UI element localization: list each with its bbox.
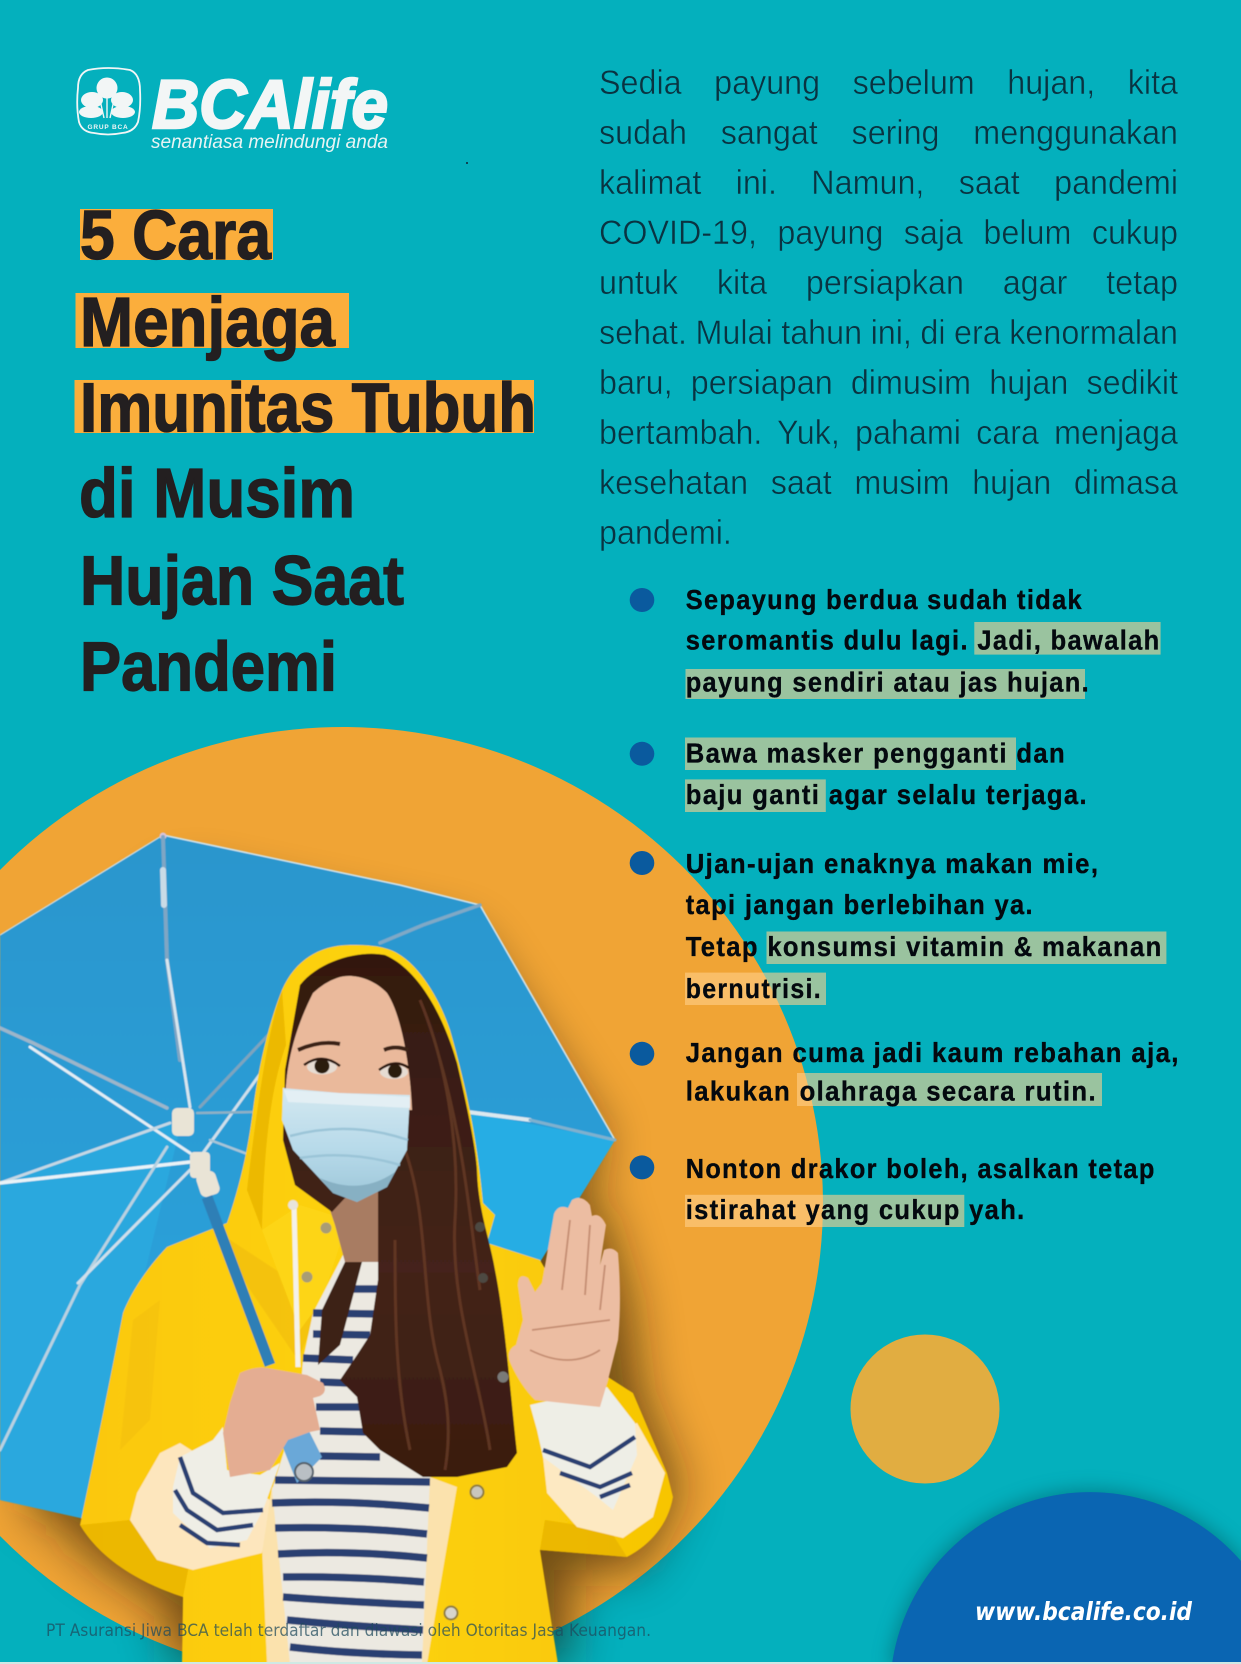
right sleeve lining [543,1423,665,1538]
bottom edge strip [0,1662,1241,1664]
intro paragraph: COVID-19, payung saja belum cukup [599,214,1178,252]
photo shadow [30,875,680,1664]
tip 2 [630,738,1088,810]
wordmark: BCAlife [152,66,388,143]
umbrella shaft [207,1197,270,1365]
tagline: senantiasa melindungi anda [151,132,388,153]
big orange circle [0,727,823,1664]
tips list [630,584,1180,1227]
umbrella handle [280,1427,322,1483]
face mask [282,1088,410,1202]
raincoat folds [80,990,627,1597]
tip 5 [630,1153,1156,1225]
logo: BCA Life [77,66,468,164]
left hand on handle [223,1368,325,1477]
tip 3: Ujan-ujan enaknya makan mie, [686,848,1099,879]
intro paragraph: baru, persiapan dimusim hujan sedikit [599,364,1178,402]
tip 5: Nonton drakor boleh, asalkan tetap [686,1153,1156,1184]
tip 1 [630,584,1161,697]
speck [466,162,468,164]
title text: Hujan Saat [80,542,404,620]
tip 3: Tetap konsumsi vitamin & makanan [686,931,1163,962]
tip 4: Jangan cuma jadi kaum rebahan aja, [686,1037,1180,1068]
website url: www.bcalife.co.id [975,1597,1193,1626]
tip 1: payung sendiri atau jas hujan. [686,666,1090,697]
intro paragraph [599,64,1178,552]
tip 3: bernutrisi. [686,973,822,1004]
tip 5: istirahat yang cukup yah. [686,1194,1026,1225]
neck [320,1180,395,1262]
striped shirt [272,1255,430,1664]
hair [283,954,517,1477]
emblem: GRUP BCA [88,124,128,131]
tip 4 [630,1037,1180,1106]
intro paragraph: untuk kita persiapkan agar tetap [599,264,1178,302]
tip 3 [630,848,1163,1004]
right sleeve striped cuff [530,1387,637,1510]
eyes [307,1060,337,1074]
title text: di Musim [79,454,355,532]
hood collar lapel [262,1205,348,1330]
tip 3: tapi jangan berlebihan ya. [686,889,1034,920]
face [285,976,412,1110]
tip 1: Sepayung berdua sudah tidak [686,584,1083,615]
title text: 5 Cara [80,196,272,274]
umbrella canopy [0,832,615,1519]
title text: Menjaga [80,283,336,361]
emblem [77,68,140,134]
tip highlights [685,622,1166,1227]
intro paragraph: pandemi. [599,514,732,552]
hood drawstring and snaps [288,1200,508,1620]
umbrella ribs [0,837,615,1450]
tip 1: seromantis dulu lagi. Jadi, bawalah [686,625,1161,656]
left sleeve lining [130,1443,270,1570]
photo: woman in raincoat with umbrella [0,832,680,1664]
raincoat [80,945,673,1664]
eyebrows [298,1043,340,1050]
raised right hand [509,1198,620,1407]
left sleeve striped cuff [173,1427,280,1548]
title text: Imunitas Tubuh [80,368,536,446]
title text: Pandemi [80,628,337,706]
intro paragraph: kalimat ini. Namun, saat pandemi [599,164,1178,202]
disclaimer: PT Asuransi Jiwa BCA telah terdaftar dan diawasi oleh Otoritas Jasa Keuangan. [46,1621,651,1641]
title [74,196,536,706]
tip 2: Bawa masker pengganti dan [686,738,1066,768]
blue corner circle [892,1492,1241,1664]
small yellow circle [850,1334,1000,1484]
intro paragraph: bertambah. Yuk, pahami cara menjaga [599,414,1178,452]
coat inner cream strips [262,1477,457,1664]
intro paragraph: sehat. Mulai tahun ini, di era kenormalan [599,314,1178,352]
title text [79,196,536,706]
intro paragraph: Sedia payung sebelum hujan, kita [599,64,1178,102]
intro paragraph: sudah sangat sering menggunakan [599,114,1178,152]
intro paragraph: kesehatan saat musim hujan dimasa [599,464,1178,502]
tip 2: baju ganti agar selalu terjaga. [686,779,1088,810]
tip 4: lakukan olahraga secara rutin. [686,1076,1097,1106]
title highlights [74,209,534,433]
umbrella hub [172,1108,221,1199]
